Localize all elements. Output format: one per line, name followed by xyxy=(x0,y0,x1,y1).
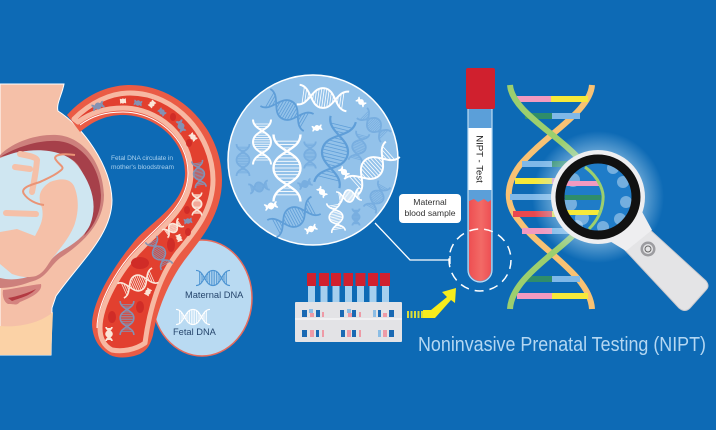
rack windows xyxy=(302,309,394,337)
vessel wall xyxy=(67,85,222,358)
uterine wall xyxy=(0,135,104,288)
magnified DNA circle xyxy=(228,75,400,245)
lens interior xyxy=(560,159,636,235)
tube rack xyxy=(295,273,402,342)
handle xyxy=(623,227,708,310)
tube body xyxy=(468,105,492,282)
large DNA helix xyxy=(509,85,600,309)
tube label xyxy=(468,128,492,190)
tube label text: NIPT - Test xyxy=(474,135,484,183)
pale DNA xyxy=(106,99,202,341)
uterine wall dark crescent xyxy=(0,141,101,236)
dashed highlight circle xyxy=(449,229,511,291)
label: fetal DNA: Fetal DNA xyxy=(173,327,217,337)
cervix xyxy=(3,284,41,304)
green strand xyxy=(510,85,598,309)
icon: fetal DNA xyxy=(176,309,210,325)
strand seen through lens xyxy=(585,167,603,229)
blue DNA strands xyxy=(237,89,391,237)
vessel white line xyxy=(80,112,188,328)
rack caps xyxy=(307,273,390,286)
icon: maternal DNA xyxy=(196,270,230,286)
grey-blue DNA xyxy=(91,101,206,335)
text: fetal DNA caption: mother's bloodstream xyxy=(111,164,174,171)
fetus xyxy=(0,154,78,277)
rack base xyxy=(295,302,402,342)
neck xyxy=(608,208,652,251)
vessel lumen xyxy=(74,93,213,351)
rack pink marks xyxy=(310,312,387,337)
lens ring xyxy=(560,159,636,235)
callout: maternal blood sample: blood sample xyxy=(404,208,456,218)
blood xyxy=(469,199,491,281)
glow xyxy=(532,131,664,263)
rack tubes xyxy=(308,285,389,303)
callout: maternal blood sample: Maternal xyxy=(413,197,447,207)
orange strand xyxy=(509,85,592,309)
lower body xyxy=(0,312,53,355)
illustration: pregnant abdomen cross-section xyxy=(0,84,112,355)
test tube xyxy=(466,68,495,282)
amniotic sac xyxy=(0,150,94,279)
maternal body xyxy=(0,84,112,355)
blood vessel xyxy=(67,85,222,358)
lens bubbles xyxy=(563,162,632,233)
umbilical cord xyxy=(23,154,75,205)
arrow xyxy=(407,288,456,318)
rungs xyxy=(510,96,600,299)
blood clots xyxy=(108,113,192,323)
label: maternal DNA: Maternal DNA xyxy=(185,290,244,300)
connector line from circle to blood sample xyxy=(375,223,450,264)
magnifying glass xyxy=(532,131,708,310)
rim xyxy=(551,150,645,244)
white DNA strands xyxy=(253,85,400,234)
tube cap xyxy=(466,68,495,109)
rungs seen through lens xyxy=(565,181,601,215)
callout: maternal blood sample xyxy=(399,194,461,223)
button xyxy=(640,242,656,256)
pouch: DNA legend xyxy=(152,240,252,356)
text: fetal DNA caption: Fetal DNA circulate in xyxy=(111,155,173,162)
